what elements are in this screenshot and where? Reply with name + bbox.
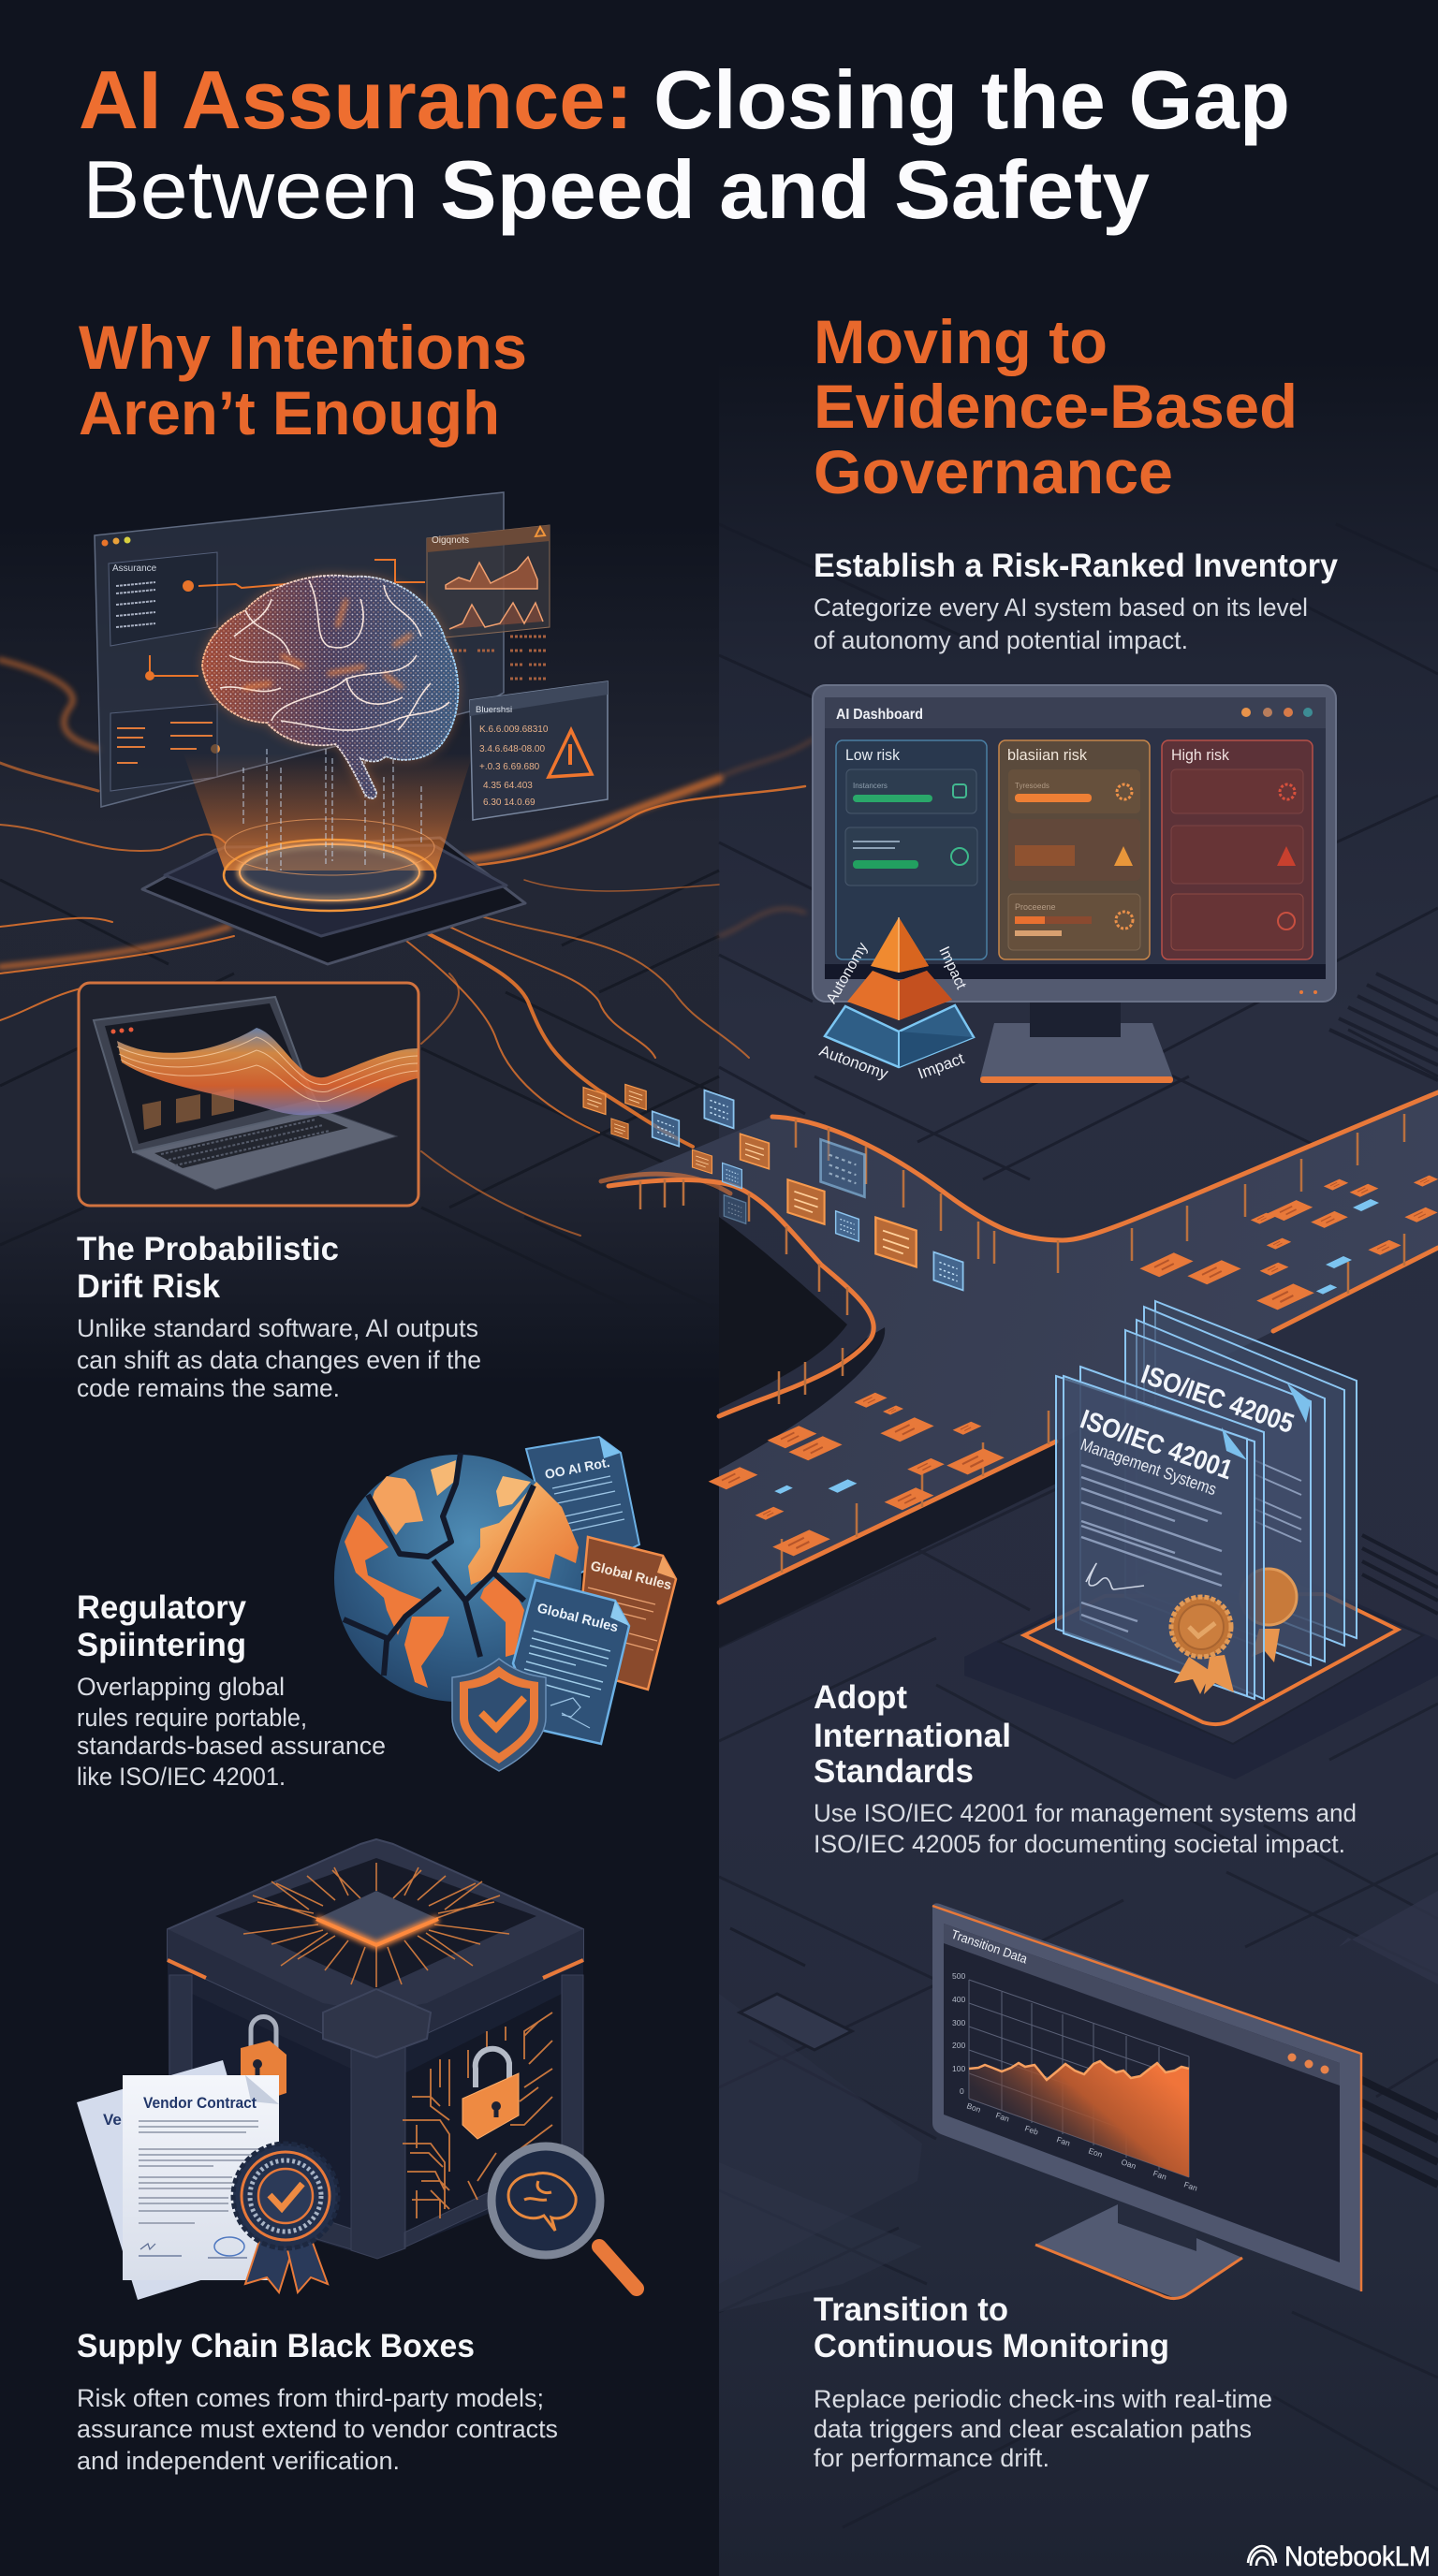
text: transition to continuous monitoring: Transition to (814, 2291, 1008, 2328)
chart axis labels: Oan (1120, 2157, 1137, 2171)
data cards on road (709, 1176, 1438, 1556)
laptop (94, 997, 397, 1190)
low risk column: Low risk (845, 746, 900, 764)
chart axis labels: Feb (1023, 2123, 1040, 2137)
text: regulatory splintering: rules require portable, (77, 1704, 307, 1732)
text: regulatory splintering: Spiintering (77, 1627, 246, 1663)
text: probabilistic drift risk: code remains the same. (77, 1374, 340, 1402)
right section heading: Moving to (814, 307, 1108, 376)
chart axis labels: Fan (1055, 2134, 1072, 2148)
area line (969, 2061, 1189, 2177)
medal (1171, 1597, 1234, 1694)
left section heading: Aren’t Enough (79, 378, 500, 447)
chart axis labels: Eon (1087, 2145, 1104, 2159)
text: transition to continuous monitoring: Replace periodic check-ins with real-time (814, 2385, 1272, 2413)
text: adopt international standards (814, 1679, 1357, 1858)
monitor: transition data chart: Transition Data (949, 1927, 1030, 1967)
platform (964, 1535, 1438, 1779)
text: adopt international standards: ISO/IEC 42005 for documenting societal impact. (814, 1830, 1345, 1858)
text: establish inventory (814, 548, 1339, 654)
text: regulatory splintering: like ISO/IEC 42001. (77, 1763, 286, 1791)
title: AI Assurance: (79, 53, 633, 146)
right section heading: Governance (814, 437, 1173, 506)
text: adopt international standards: Use ISO/IEC 42001 for management systems and (814, 1799, 1357, 1827)
title (79, 53, 1290, 236)
low risk column: Instancers (853, 782, 888, 790)
text: regulatory splintering: Regulatory (77, 1589, 247, 1626)
alert panel: 3.4.6.648-08.00 (479, 744, 545, 754)
bridge wall and pit (719, 1327, 1056, 1647)
icon: risk pyramid: Impact (935, 944, 969, 992)
text: supply chain black boxes (77, 2328, 558, 2475)
text: probabilistic drift risk: Unlike standard software, AI outputs (77, 1314, 478, 1342)
title: Between (82, 143, 418, 236)
text: transition to continuous monitoring: Continuous Monitoring (814, 2328, 1169, 2364)
chart axis labels (952, 1971, 1199, 2193)
alert panel: 6.30 14.0.69 (483, 798, 536, 808)
vendor contract documents (77, 2060, 279, 2300)
text: adopt international standards: Adopt (814, 1679, 907, 1716)
text: probabilistic drift risk: can shift as data changes even if the (77, 1346, 481, 1374)
document: global rules orange (576, 1537, 676, 1690)
text: supply chain black boxes: Risk often comes from third-party models; (77, 2384, 544, 2412)
orange bands (168, 1960, 583, 2050)
rail posts (640, 1114, 1404, 1573)
panel: diagnostics: Oigqnots (432, 535, 469, 546)
chart axis labels: Bon (965, 2100, 982, 2115)
text: probabilistic drift risk (77, 1231, 481, 1402)
alert panel: 4.35 64.403 (483, 781, 533, 791)
lid (168, 1839, 583, 2055)
panel: diagnostics (427, 525, 550, 679)
text: supply chain black boxes: Supply Chain Black Boxes (77, 2328, 475, 2364)
icon: ISO standard documents on platform (964, 1301, 1438, 1779)
text: transition to continuous monitoring: for performance drift. (814, 2444, 1049, 2472)
title: Speed and Safety (440, 143, 1150, 236)
road surface (609, 1092, 1438, 1603)
medium risk column: blasiian risk (1007, 746, 1087, 764)
stand (980, 1002, 1173, 1083)
right section heading (814, 307, 1298, 506)
glass screen back (95, 492, 504, 807)
monitor: AI dashboard (813, 685, 1336, 1083)
glass screen back: Assurance (112, 564, 157, 574)
document: AI act (526, 1437, 639, 1582)
text: establish inventory: Categorize every AI system based on its level (814, 593, 1308, 622)
text: establish inventory: of autonomy and potential impact. (814, 626, 1188, 654)
monitor: AI dashboard: AI Dashboard (836, 707, 923, 723)
title: Closing the Gap (653, 53, 1290, 146)
document: global rules blue: Global Rules (536, 1601, 620, 1635)
glowing ring (224, 819, 435, 911)
chart axis labels: 0 (960, 2086, 964, 2096)
icon: ISO standard documents on platform: Management Systems (1078, 1435, 1219, 1499)
chest body (168, 1956, 583, 2259)
chart grid (969, 1980, 1189, 2177)
chart axis labels: 300 (952, 2018, 965, 2027)
brain (202, 576, 458, 798)
text: regulatory splintering (77, 1589, 386, 1791)
panel: laptop drift inset (79, 983, 418, 1206)
text: probabilistic drift risk: The Probabilistic (77, 1231, 339, 1267)
chart axis labels: Fan (994, 2110, 1011, 2124)
icon: cracked globe with rule documents (334, 1437, 676, 1771)
documents: 42001 stack (1056, 1367, 1264, 1699)
text: probabilistic drift risk: Drift Risk (77, 1268, 221, 1305)
text: transition to continuous monitoring (814, 2291, 1272, 2472)
icon: black box chest (77, 1839, 637, 2300)
text: adopt international standards: International (814, 1718, 1011, 1754)
icon: risk pyramid: Autonomy (817, 1042, 891, 1083)
low risk column (836, 740, 987, 959)
chart axis labels: 400 (952, 1995, 965, 2004)
text: adopt international standards: Standards (814, 1753, 974, 1790)
document: global rules blue (513, 1580, 629, 1744)
globe (334, 1453, 581, 1702)
chart axis labels: Fan (1182, 2179, 1199, 2193)
lock left (241, 2016, 286, 2097)
stand (1035, 2200, 1242, 2299)
vendor contract documents: Ve (103, 2111, 122, 2129)
high risk column: High risk (1171, 746, 1229, 764)
chart axis labels: 500 (952, 1971, 965, 1981)
alert panel (470, 681, 608, 820)
icon: risk pyramid: Impact (916, 1049, 967, 1082)
platform (142, 838, 525, 964)
text: transition to continuous monitoring: data triggers and clear escalation paths (814, 2415, 1252, 2443)
chart axis labels: 100 (952, 2064, 965, 2073)
text: regulatory splintering: standards-based assurance (77, 1732, 386, 1760)
icon: risk pyramid: Autonomy (824, 940, 871, 1006)
circuit traces (403, 2012, 552, 2218)
text: establish inventory: Establish a Risk-Ranked Inventory (814, 548, 1339, 584)
alert panel: K.6.6.009.68310 (479, 724, 549, 735)
chest frame (169, 1975, 583, 2259)
right section heading: Evidence-Based (814, 372, 1298, 441)
high risk column (1162, 740, 1313, 959)
shield (452, 1659, 546, 1771)
hologram: brain over platform (95, 492, 608, 964)
text: regulatory splintering: Overlapping global (77, 1673, 285, 1701)
road bridge (583, 1084, 1438, 1647)
documents: 42005 stack (1125, 1301, 1357, 1665)
alert panel: +.0.3 6.69.680 (479, 762, 540, 772)
icon: ISO standard documents on platform: ISO/IEC 42001 (1077, 1404, 1237, 1486)
floating data panels (583, 1084, 963, 1290)
left section heading: Why Intentions (79, 313, 527, 382)
waves (117, 1028, 418, 1115)
corner brace (323, 1989, 431, 2057)
vendor contract documents: Vendor Contract (143, 2094, 257, 2112)
alert panel: Bluershsi (476, 705, 512, 715)
lock right (462, 2049, 519, 2139)
orange data flow lines (0, 660, 813, 1236)
magnifier (492, 2146, 637, 2289)
medium risk column: Proceeene (1015, 902, 1056, 912)
chart axis labels: Fan (1152, 2168, 1168, 2182)
document: AI act: OO AI Rot. (544, 1455, 611, 1482)
medium risk column (999, 740, 1150, 959)
document: global rules orange: Global Rules (589, 1559, 673, 1593)
medium risk column: Tyresoeds (1015, 782, 1049, 790)
monitor: transition data chart (932, 1903, 1361, 2299)
icon: ISO standard documents on platform: ISO/IEC 42005 (1137, 1359, 1298, 1440)
certification seal (233, 2144, 338, 2292)
icon: risk pyramid (817, 917, 974, 1083)
text: supply chain black boxes: and independent verification. (77, 2447, 400, 2475)
rails (601, 1092, 1438, 1603)
text: supply chain black boxes: assurance must extend to vendor contracts (77, 2415, 558, 2443)
chart axis labels: 200 (952, 2041, 965, 2050)
light columns (243, 749, 421, 871)
cone of light (183, 754, 473, 871)
left section heading (79, 313, 527, 447)
